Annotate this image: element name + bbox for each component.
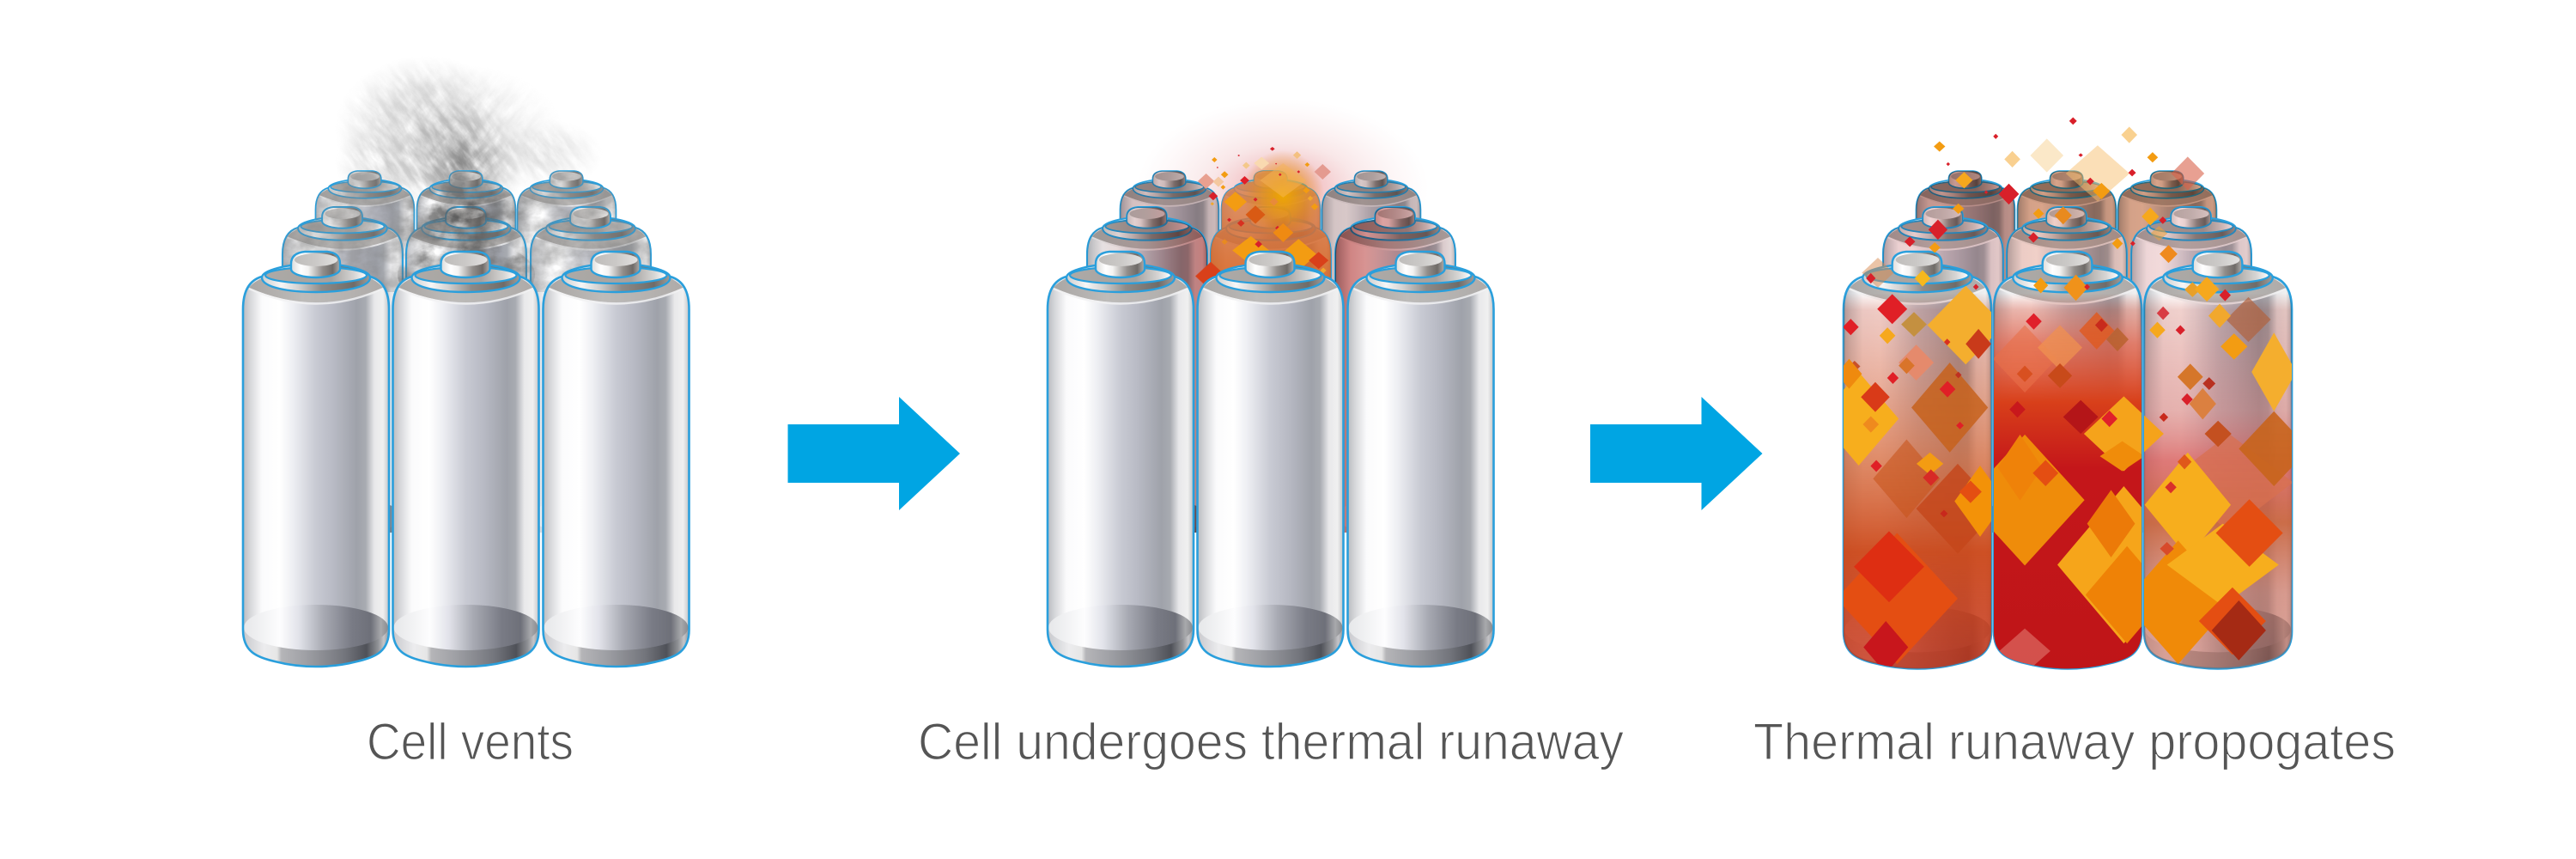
middle row heat tint (1087, 207, 1455, 549)
panel: thermal runaway propagates (1819, 118, 2309, 673)
back row cells (316, 171, 616, 452)
middle cell fire diamonds (1994, 312, 2142, 665)
back row cells (1917, 171, 2216, 452)
burning centre cell (1211, 171, 1331, 278)
flame core (1242, 150, 1324, 240)
right cell fire diamonds (2144, 277, 2293, 664)
left cell fire diamonds (1819, 286, 2006, 673)
panel: cell vents (243, 0, 689, 667)
middle row cells (283, 207, 651, 549)
panel: cell undergoes thermal runaway (1048, 99, 1494, 667)
middle row tint (1883, 207, 2251, 549)
front row cells (243, 252, 689, 667)
back row cells (1120, 171, 1420, 452)
front row fire fill (1844, 252, 2292, 668)
flying embers (1862, 118, 2231, 302)
smoke over cells (283, 171, 651, 292)
front row cells (1844, 252, 2292, 668)
heat glow (1137, 99, 1429, 279)
back row tint (1917, 171, 2216, 452)
caption: cell undergoes thermal runaway: Cell undergoes thermal runaway (918, 713, 1624, 771)
back row heat tint (1120, 171, 1420, 452)
middle row cells (1087, 207, 1455, 549)
arrow 2 (1590, 397, 1762, 510)
front row cells (1048, 252, 1494, 667)
caption: thermal runaway propogates: Thermal runaway propogates (1753, 713, 2396, 771)
caption: cell vents: Cell vents (367, 713, 574, 771)
front row pink tint (1844, 252, 2292, 668)
middle row cells (1883, 207, 2251, 549)
smoke plume (250, 0, 688, 362)
arrow 1 (788, 397, 960, 510)
fire diamonds (1195, 147, 1331, 290)
